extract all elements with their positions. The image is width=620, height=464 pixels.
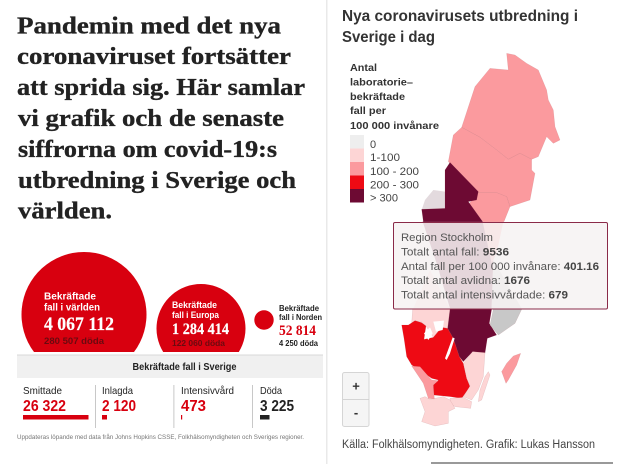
tooltip: Region Stockholm: Region Stockholm xyxy=(401,232,493,244)
source line: Källa: Folkhälsomyndigheten. Grafik: Lukas Hansson xyxy=(342,439,595,451)
legend: Antal xyxy=(350,62,377,74)
stat: intensive care xyxy=(181,385,234,420)
legend: fall per xyxy=(350,105,386,117)
tooltip: Region Stockholm: Antal fall per 100 000 invånare: 401.16 xyxy=(401,261,599,273)
stat: hospitalised xyxy=(102,385,136,420)
map: Sweden regions xyxy=(402,53,560,426)
band: Sweden heading xyxy=(17,354,323,378)
map title: Sverige i dag xyxy=(342,29,435,46)
circle: Europe cases: fall i Europa xyxy=(172,310,220,320)
circle: world cases: 4 067 112 xyxy=(44,314,114,335)
heading: att sprida sig. Här samlar xyxy=(17,75,305,101)
heading: världen. xyxy=(18,198,112,224)
tooltip: Region Stockholm: Totalt antal intensivvårdade: 679 xyxy=(401,290,568,302)
stat: deaths: 3 225 xyxy=(260,398,294,415)
band: Sweden heading: Bekräftade fall i Sverige xyxy=(132,361,237,373)
legend: > 300 xyxy=(370,192,398,204)
circle: Europe cases: Bekräftade xyxy=(172,300,217,310)
circle: world cases: fall i världen xyxy=(44,302,100,314)
circle: world cases: 280 507 döda xyxy=(44,336,105,347)
legend xyxy=(350,62,439,204)
tooltip: Region Stockholm xyxy=(394,222,608,309)
stat: intensive care: 473 xyxy=(181,398,206,415)
legend: 100 000 invånare xyxy=(350,120,439,132)
circle: world cases xyxy=(22,252,147,352)
circle: Nordic cases: 52 814 xyxy=(279,323,316,339)
heading xyxy=(17,14,305,224)
circle: Nordic cases: 4 250 döda xyxy=(279,339,319,348)
zoom control: - xyxy=(354,405,358,420)
stat: hospitalised: Inlagda xyxy=(102,385,133,397)
footnote: Uppdateras löpande med data från Johns Hopkins CSSE, Folkhälsomyndigheten och Sveriges regioner. xyxy=(17,433,304,441)
circle: Nordic cases xyxy=(254,304,322,348)
legend: 200 - 300 xyxy=(370,180,419,192)
stat: intensive care: Intensivvård xyxy=(181,385,234,397)
map title xyxy=(342,8,578,46)
zoom control xyxy=(342,372,369,426)
heading: Pandemin med det nya xyxy=(17,14,281,40)
stat: infected xyxy=(23,385,88,420)
heading: siffrorna om covid-19:s xyxy=(18,137,277,163)
stat: hospitalised: 2 120 xyxy=(102,398,136,415)
stat: deaths xyxy=(260,385,294,420)
stat: deaths: Döda xyxy=(260,385,282,397)
heading: vi grafik och de senaste xyxy=(18,106,284,132)
heading: utbredning i Sverige och xyxy=(18,168,296,194)
circle: world cases: Bekräftade xyxy=(44,290,96,302)
circle: Europe cases: 1 284 414 xyxy=(172,321,229,338)
legend: 1-100 xyxy=(370,152,400,164)
zoom control: + xyxy=(352,378,360,394)
circle: Europe cases xyxy=(156,284,246,352)
stat: infected: 26 322 xyxy=(23,398,66,415)
legend: bekräftade xyxy=(350,91,405,103)
legend: 100 - 200 xyxy=(370,166,419,178)
tooltip: Region Stockholm: Totalt antal avlidna: 1676 xyxy=(401,275,530,287)
circle: Europe cases: 122 060 döda xyxy=(172,339,225,348)
legend: laboratorie– xyxy=(350,76,413,88)
circle: Nordic cases: Bekräftade xyxy=(279,304,319,313)
legend: 0 xyxy=(370,139,376,151)
map title: Nya coronavirusets utbredning i xyxy=(342,8,578,25)
circle: Nordic cases: fall i Norden xyxy=(279,313,322,322)
tooltip: Region Stockholm: Totalt antal fall: 9536 xyxy=(401,246,509,258)
heading: coronaviruset fortsätter xyxy=(17,44,291,70)
stat: infected: Smittade xyxy=(23,385,62,397)
